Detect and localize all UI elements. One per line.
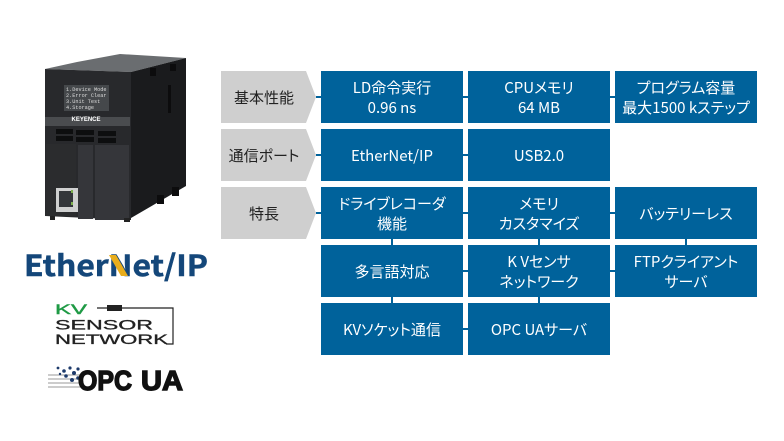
box: EtherNet/IP: EtherNet/IP [351, 145, 433, 166]
box: FTPクライアントサーバ: サーバ [665, 271, 707, 292]
box: EtherNet/IP [321, 129, 463, 181]
label: 基本性能: 基本性能 [234, 87, 294, 108]
box: バッテリーレス [615, 187, 757, 239]
label: 通信ポート: 通信ポート [229, 145, 299, 166]
box: CPUメモリ: CPUメモリ [504, 77, 574, 98]
box: LD命令実行 [321, 71, 463, 123]
product photo: KV-8000 controller: KEYENCE [71, 117, 101, 123]
box: OPC UAサーバ [468, 303, 610, 355]
box: プログラム容量: プログラム容量 [637, 77, 735, 98]
box: LD命令実行: LD命令実行 [353, 77, 431, 98]
label: 特長: 特長 [249, 203, 279, 224]
box: OPC UAサーバ: OPC UAサーバ [491, 319, 587, 340]
logo: KV Sensor Network: NETWORK [55, 332, 168, 347]
logo: KV Sensor Network: KV [55, 301, 88, 317]
label: 基本性能 [221, 71, 316, 123]
box: メモリカスタマイズ: メモリ [519, 193, 559, 214]
logo: OPC UA [48, 365, 184, 396]
box: USB2.0: USB2.0 [514, 145, 564, 166]
product photo: KV-8000 controller: 1.Device Mode [66, 87, 106, 93]
box: KVセンサネットワーク: ネットワーク [499, 271, 579, 292]
box: メモリカスタマイズ [468, 187, 610, 239]
box: CPUメモリ: 64 MB [518, 97, 560, 118]
product photo: KV-8000 controller: 2.Error Clear [66, 93, 106, 99]
box: プログラム容量: 最大1500 kステップ [622, 97, 750, 118]
logo: OPC UA: UA [141, 365, 183, 396]
box: 多言語対応 [321, 245, 463, 297]
label: 通信ポート [221, 129, 316, 181]
box: CPUメモリ [468, 71, 610, 123]
label: 特長 [221, 187, 316, 239]
product photo: KV-8000 controller [45, 54, 186, 222]
box: KVソケット通信 [321, 303, 463, 355]
box: バッテリーレス: バッテリーレス [639, 203, 733, 224]
box: ドライブレコーダ機能 [321, 187, 463, 239]
box: FTPクライアントサーバ [615, 245, 757, 297]
box: FTPクライアントサーバ: FTPクライアント [634, 251, 738, 272]
box: KVセンサネットワーク [468, 245, 610, 297]
logo: KV Sensor Network: SENSOR [55, 318, 153, 332]
logo: OPC UA: OPC [78, 365, 132, 396]
logo: EtherNet/IP: EtherNet/IP [24, 243, 208, 285]
product photo: KV-8000 controller: 3.Unit Test [66, 99, 100, 105]
box: 多言語対応: 多言語対応 [354, 261, 430, 282]
box: KVソケット通信: KVソケット通信 [343, 319, 441, 340]
box: USB2.0 [468, 129, 610, 181]
product photo: KV-8000 controller: 4.Storage [66, 105, 94, 111]
box: KVセンサネットワーク: K Vセンサ [507, 251, 571, 272]
box: メモリカスタマイズ: カスタマイズ [499, 213, 579, 234]
box: ドライブレコーダ機能: ドライブレコーダ [338, 193, 446, 214]
box: LD命令実行: 0.96 ns [368, 97, 416, 118]
logo: KV Sensor Network [55, 301, 174, 347]
box: ドライブレコーダ機能: 機能 [377, 213, 407, 234]
box: プログラム容量 [615, 71, 757, 123]
